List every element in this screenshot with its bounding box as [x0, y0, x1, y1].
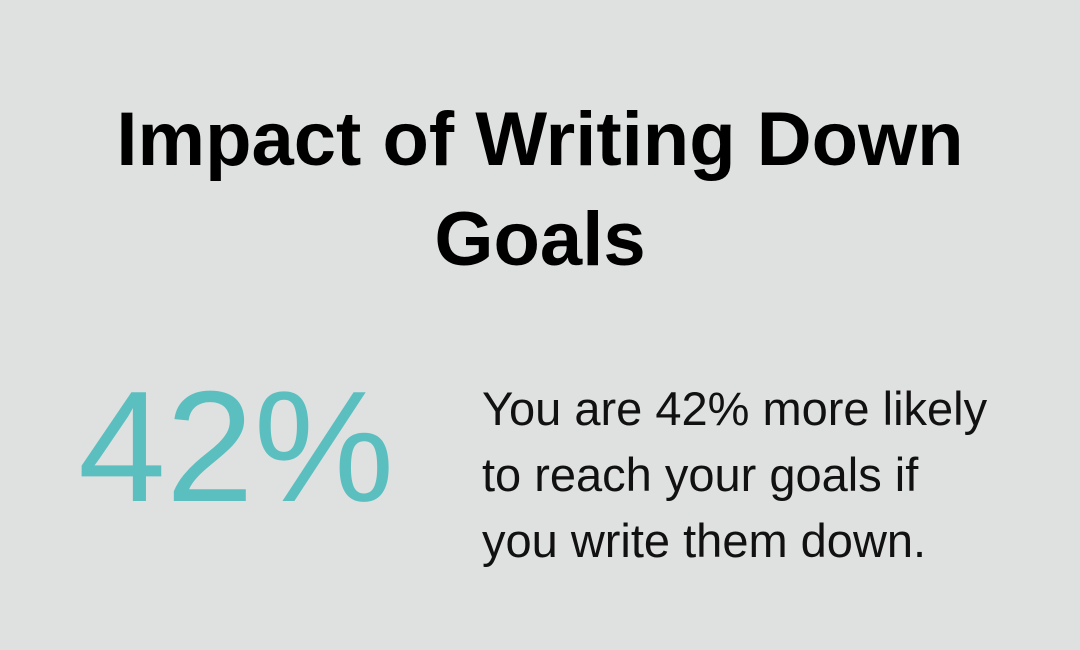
- title: [116, 97, 964, 282]
- description text: you write them down.: [482, 514, 926, 567]
- description text: You are 42% more likely: [482, 382, 987, 435]
- title: Impact of Writing Down: [116, 97, 964, 182]
- title: Goals: [434, 197, 646, 282]
- statistic: 42%: 42%: [78, 359, 394, 535]
- description text: [482, 382, 987, 567]
- description text: to reach your goals if: [482, 448, 918, 501]
